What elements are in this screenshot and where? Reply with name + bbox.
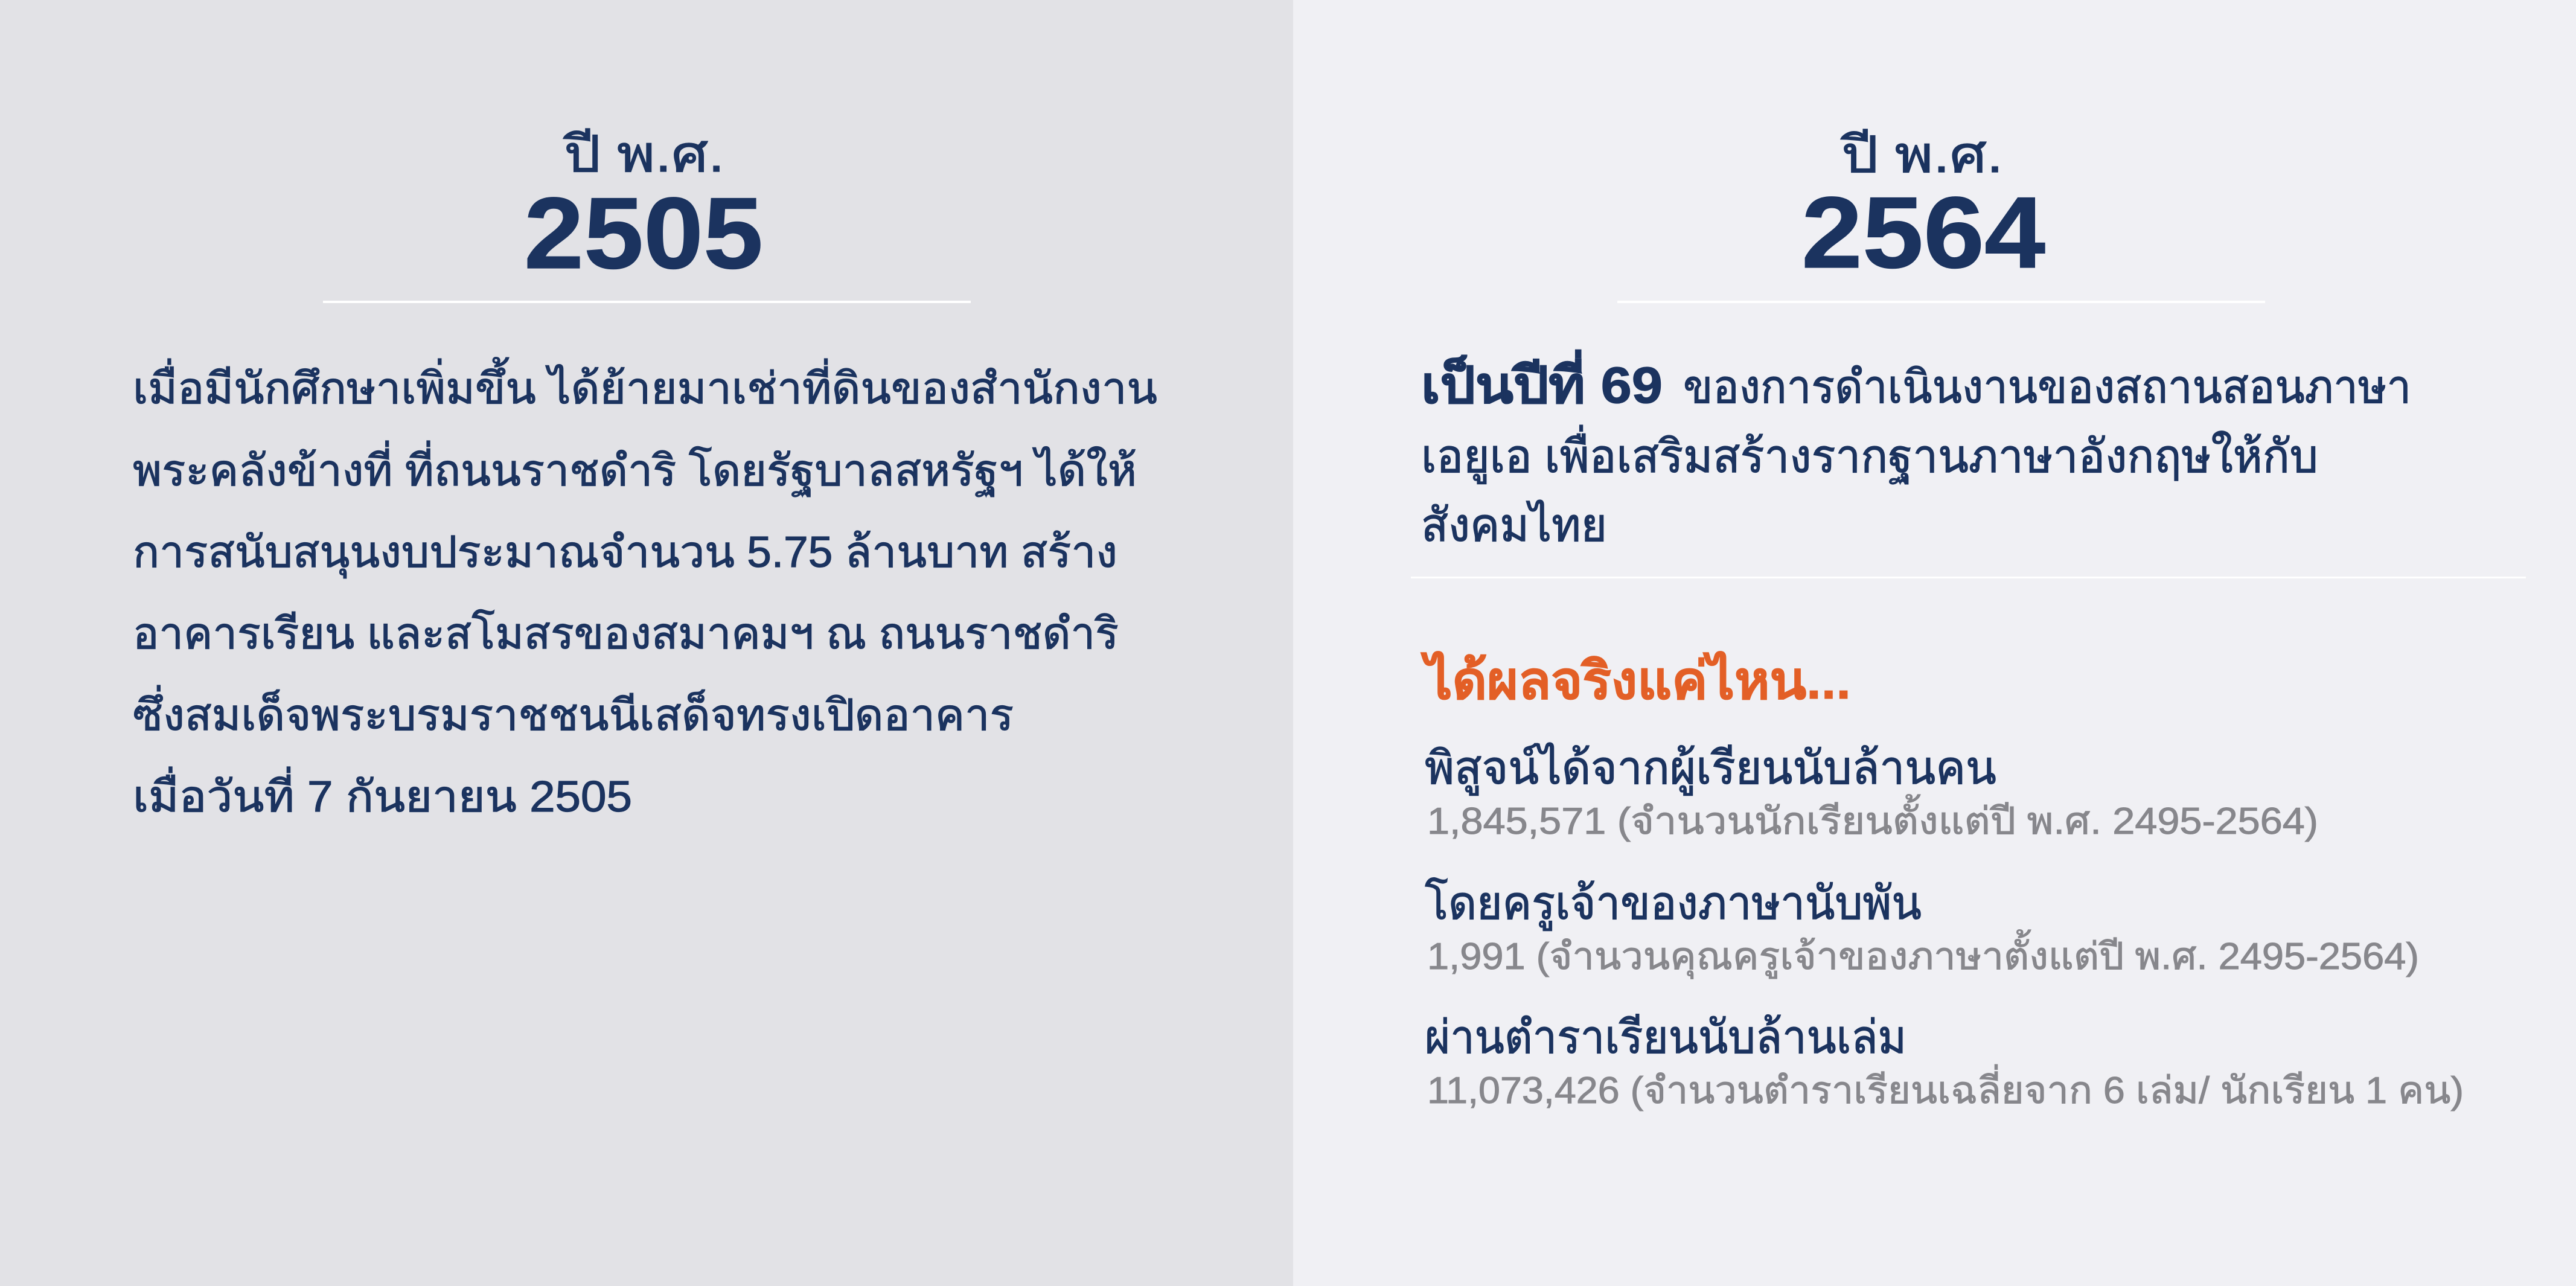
text block: history paragraph: เมื่อมีนักศึกษาเพิ่มขึ้น ได้ย้ายมาเช่าที่ดินของสำนักงาน [133,357,1157,413]
stat: textbooks [1425,1012,2464,1112]
text block: 69th year paragraph [1421,350,2411,551]
text block: history paragraph: พระคลังข้างที่ ที่ถนนราชดำริ โดยรัฐบาลสหรัฐฯ ได้ให้ [133,441,1137,497]
text block: history paragraph: อาคารเรียน และสโมสรของสมาคมฯ ณ ถนนราชดำริ [133,609,1119,658]
text block: 69th year paragraph: ของการดำเนินงานของสถานสอนภาษา [1683,362,2411,413]
text block: history paragraph: การสนับสนุนงบประมาณจำนวน 5.75 ล้านบาท สร้าง [133,528,1117,578]
stat: learners: 1,845,571 (จำนวนนักเรียนตั้งแต่ปี พ.ศ. 2495-2564) [1427,794,2318,842]
text block: history paragraph [133,357,1157,821]
panel: year 2564 [1293,0,2576,1286]
stat: native teachers [1425,877,2419,979]
stat: learners: พิสูจน์ได้จากผู้เรียนนับล้านคน [1425,742,1996,796]
stat: learners [1425,742,2318,842]
heading: year label left: ปี พ.ศ. [563,126,724,182]
heading: year label right: ปี พ.ศ. [1840,126,2003,183]
text block: history paragraph: ซึ่งสมเด็จพระบรมราชชนนีเสด็จทรงเปิดอาคาร [133,685,1014,740]
stat: textbooks: ผ่านตำราเรียนนับล้านเล่ม [1425,1012,1906,1063]
panel: year 2505 [0,0,1293,1286]
text block: history paragraph: เมื่อวันที่ 7 กันยายน 2505 [133,767,632,821]
stat: native teachers: 1,991 (จำนวนคุณครูเจ้าของภาษาตั้งแต่ปี พ.ศ. 2495-2564) [1427,929,2419,979]
stat: native teachers: โดยครูเจ้าของภาษานับพัน [1425,877,1922,931]
text block: 69th year paragraph: เอยูเอ เพื่อเสริมสร้างรากฐานภาษาอังกฤษให้กับ [1421,425,2318,484]
text block: 69th year paragraph: เป็นปีที่ 69 [1421,350,1663,414]
stat: textbooks: 11,073,426 (จำนวนตำราเรียนเฉลี่ยจาก 6 เล่ม/ นักเรียน 1 คน) [1427,1064,2464,1112]
heading: year 2505: 2505 [524,176,763,290]
heading: year 2564: 2564 [1801,176,2045,289]
text block: 69th year paragraph: สังคมไทย [1421,499,1607,551]
heading: results question: ได้ผลจริงแค่ไหน... [1421,651,1851,710]
